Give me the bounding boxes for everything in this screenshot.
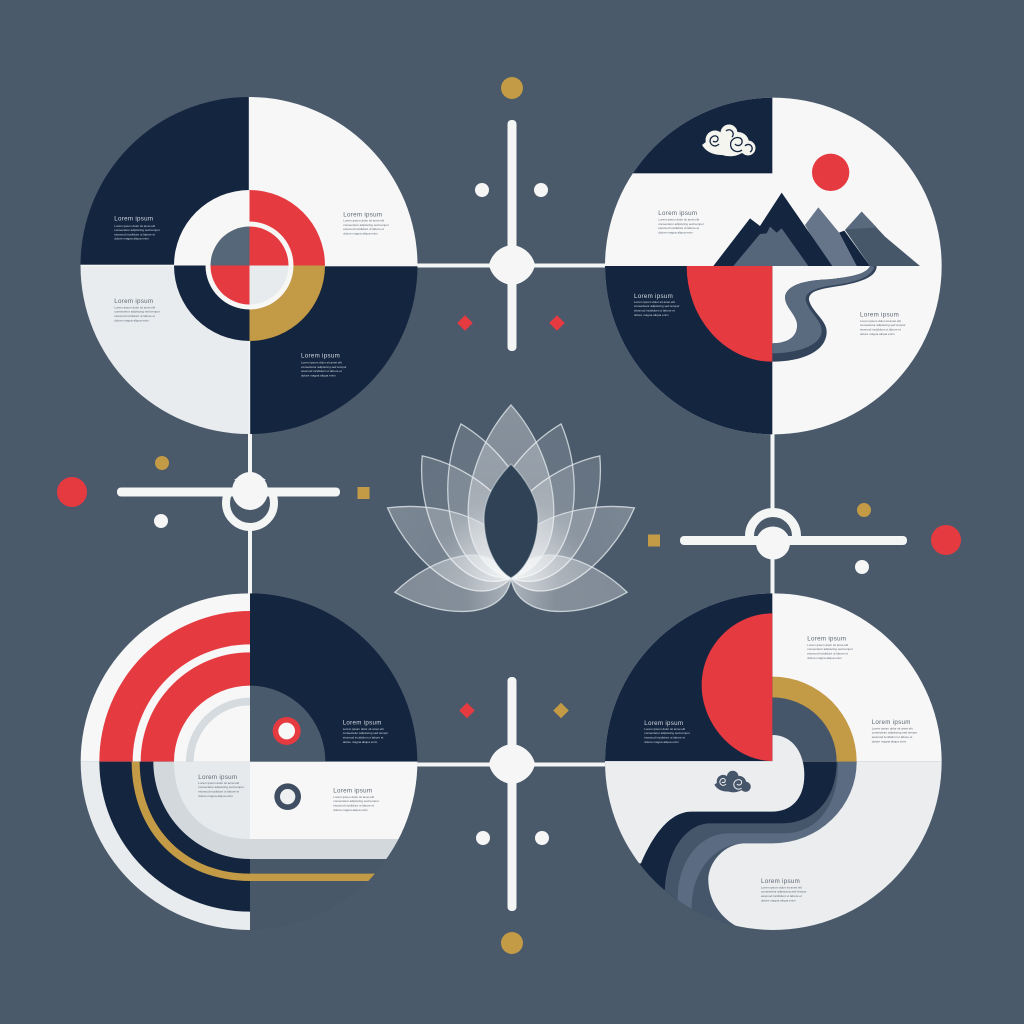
text block: Lorem ipsum dolor sit amet elit (198, 781, 239, 785)
text block: Lorem ipsum (860, 312, 899, 318)
text block: dolore magna aliqua enim (301, 373, 336, 377)
river (772, 266, 877, 362)
text block (343, 212, 389, 235)
text block: eiusmod incididunt ut labore et (761, 894, 802, 898)
text block (658, 210, 704, 234)
text block: eiusmod incididunt ut labore et (658, 226, 699, 230)
decorative dots: left (57, 456, 370, 528)
panel: top-right mountain circle (605, 98, 942, 434)
text block (761, 878, 807, 902)
text block: dolore magna aliqua enim (634, 313, 669, 317)
decorative dots and diamonds: bottom (459, 703, 569, 954)
text block (872, 719, 917, 743)
text block: consectetur adipiscing sed tempor (343, 731, 388, 735)
text block: dolore magna aliqua enim (658, 230, 693, 234)
text block: consectetur adipiscing sed tempor (343, 223, 389, 227)
text block: dolore magna aliqua enim (761, 898, 796, 902)
text block (343, 720, 388, 744)
text block: Lorem ipsum dolor sit amet elit (644, 727, 685, 731)
text block: eiusmod incididunt ut labore et (114, 232, 155, 236)
mountains (713, 193, 920, 266)
text block: Lorem ipsum (114, 298, 153, 305)
text block: dolore magna aliqua enim (872, 739, 907, 743)
text block: eiusmod incididunt ut labore et (343, 736, 384, 740)
text block: Lorem ipsum (198, 774, 237, 781)
text block: Lorem ipsum dolor sit amet elit (860, 319, 901, 323)
text block: consectetur adipiscing sed tempor (658, 222, 704, 226)
text block: eiusmod incididunt ut labore et (634, 308, 675, 312)
text block: eiusmod incididunt ut labore et (644, 736, 685, 740)
text block (333, 788, 379, 812)
text block: Lorem ipsum (333, 788, 372, 794)
text block: Lorem ipsum (634, 293, 673, 300)
panel: bottom-right wave circle (605, 593, 942, 930)
icon: cloud (714, 771, 751, 792)
connector: left vertical line, bar and ring (117, 425, 340, 600)
text block: Lorem ipsum (761, 878, 800, 885)
text block (114, 298, 160, 322)
text block: Lorem ipsum dolor sit amet elit (872, 726, 913, 730)
text block: Lorem ipsum dolor sit amet elit (343, 727, 384, 731)
text block: dolore magna aliqua enim (644, 740, 679, 744)
text block (198, 774, 244, 798)
icon: dark ring (274, 783, 301, 810)
text block: dolore magna aliqua enim (860, 332, 895, 336)
text block: consectetur adipiscing sed tempor (872, 731, 917, 735)
text block: Lorem ipsum dolor sit amet elit (333, 795, 374, 799)
text block: eiusmod incididunt ut labore et (343, 227, 384, 231)
text block (301, 352, 347, 377)
decorative dots: right (648, 503, 961, 574)
connector: right vertical line, bar and ring (680, 425, 907, 600)
text block: consectetur adipiscing sed tempor (114, 310, 160, 314)
text block (634, 293, 680, 317)
grey inner band (153, 762, 250, 859)
text block (807, 636, 853, 660)
gold arc (132, 762, 375, 881)
text block: dolore magna aliqua enim (343, 231, 378, 235)
centre dial (210, 226, 288, 304)
gold arc (772, 677, 857, 762)
text block: eiusmod incididunt ut labore et (872, 735, 913, 739)
navy arc (99, 762, 250, 912)
icon: cloud (702, 124, 756, 156)
text block: Lorem ipsum (343, 720, 382, 726)
text block: eiusmod incididunt ut labore et (333, 804, 374, 808)
text block: Lorem ipsum (807, 636, 846, 642)
text block: eiusmod incididunt ut labore et (114, 314, 155, 318)
text block: dolore magna aliqua enim (198, 794, 233, 798)
text block: dolore magna aliqua enim (114, 237, 149, 241)
text block: Lorem ipsum dolor sit amet elit (761, 886, 802, 890)
panel: bottom-left arcs circle (80, 593, 418, 930)
text block: eiusmod incididunt ut labore et (301, 369, 342, 373)
dark sector (250, 686, 325, 762)
text block: consectetur adipiscing sed tempor (807, 647, 853, 651)
text block: Lorem ipsum (872, 719, 911, 726)
text block: eiusmod incididunt ut labore et (860, 328, 901, 332)
text block: consectetur adipiscing sed tempor (114, 228, 160, 232)
text block: Lorem ipsum (301, 352, 340, 360)
text block: Lorem ipsum dolor sit amet elit (114, 224, 155, 228)
text block: eiusmod incididunt ut labore et (807, 652, 848, 656)
text block: Lorem ipsum dolor sit amet elit (634, 300, 675, 304)
text block: Lorem ipsum (658, 210, 697, 217)
text block: consectetur adipiscing sed tempor (860, 323, 906, 327)
text block: dolore magna aliqua enim (114, 318, 149, 322)
text block: Lorem ipsum dolor sit amet elit (807, 643, 848, 647)
text block: dolore magna aliqua enim (333, 808, 368, 812)
wave bands (664, 762, 942, 930)
text block: Lorem ipsum dolor sit amet elit (658, 218, 699, 222)
text block: consectetur adipiscing sed tempor (301, 365, 347, 369)
text block: Lorem ipsum (644, 720, 683, 727)
light swirl (595, 735, 804, 863)
text block: Lorem ipsum dolor sit amet elit (114, 306, 155, 310)
text block: consectetur adipiscing sed tempor (198, 785, 244, 789)
text block: Lorem ipsum dolor sit amet elit (343, 218, 384, 222)
lotus centre (484, 464, 538, 578)
text block (114, 216, 160, 241)
connector: bottom horizontal line and cross (410, 677, 615, 911)
ring segments (174, 190, 325, 341)
text block: dolore magna aliqua enim (807, 656, 842, 660)
text block: consectetur adipiscing sed tempor (644, 731, 690, 735)
text block: Lorem ipsum (114, 216, 153, 222)
text block: Lorem ipsum (343, 212, 382, 218)
text block (860, 312, 906, 336)
red arcs (99, 611, 250, 762)
text block: consectetur adipiscing sed tempor (761, 890, 807, 894)
decorative dots and diamonds: top (457, 77, 565, 331)
panel: top-left concentric circle (80, 96, 420, 436)
text block: Lorem ipsum dolor sit amet elit (301, 360, 342, 364)
icon: sun (812, 154, 849, 191)
text block (644, 720, 690, 744)
text block: eiusmod incididunt ut labore et (198, 790, 239, 794)
text block: dolore magna aliqua enim (343, 740, 378, 744)
lotus (371, 405, 651, 620)
connector: top horizontal line and cross (410, 120, 615, 351)
text block: consectetur adipiscing sed tempor (634, 304, 680, 308)
text block: consectetur adipiscing sed tempor (333, 799, 379, 803)
icon: red ring (273, 717, 301, 745)
